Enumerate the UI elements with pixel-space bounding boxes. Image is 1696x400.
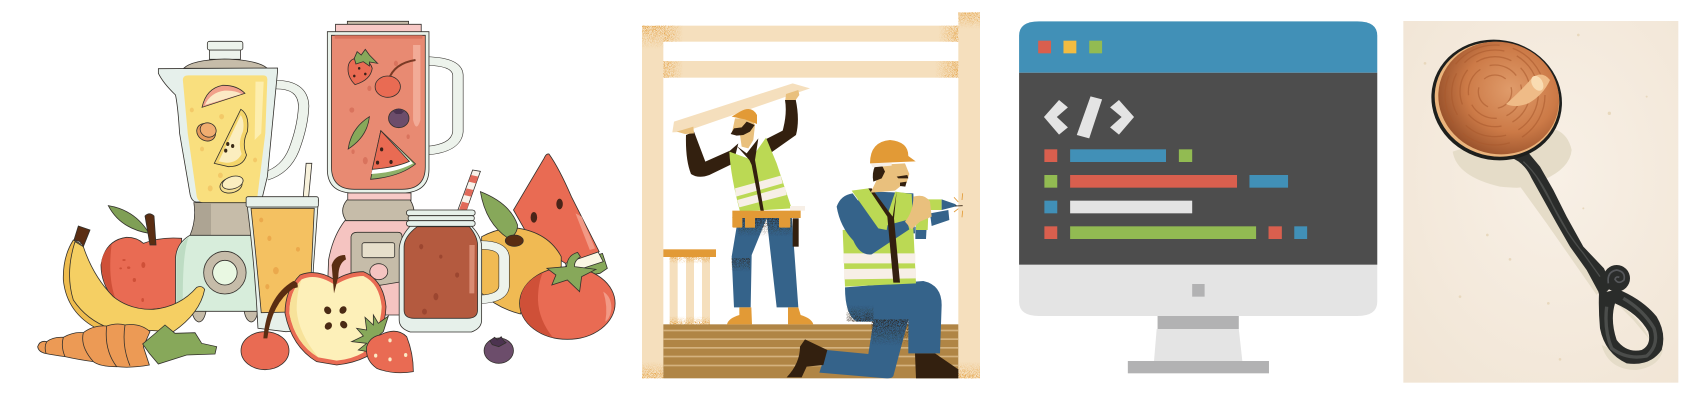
loop highlight bbox=[1606, 298, 1656, 357]
blender handle bbox=[266, 85, 304, 176]
bright glint bbox=[1529, 74, 1546, 93]
tool belt bbox=[732, 206, 805, 247]
strawberry bbox=[352, 315, 413, 373]
straw bbox=[303, 163, 312, 202]
blender collar bbox=[190, 203, 256, 236]
red apple bbox=[101, 206, 182, 309]
spoon handle bbox=[1510, 153, 1612, 298]
blueberry bbox=[484, 337, 513, 363]
blender handle bbox=[427, 61, 458, 151]
panel: smoothie blenders and fruit bbox=[38, 21, 615, 373]
juice specks bbox=[259, 218, 300, 289]
undershirt bbox=[857, 191, 915, 233]
dark sleeves bbox=[686, 99, 798, 177]
watermelon slice bbox=[513, 154, 607, 278]
hi-vis vest bbox=[843, 192, 916, 287]
panel: desktop computer with code bbox=[1019, 21, 1377, 373]
pink base bbox=[327, 221, 410, 315]
glass rim bbox=[246, 197, 318, 207]
smoothie top shade bbox=[335, 35, 422, 39]
blender lid bbox=[184, 41, 267, 68]
carrot bbox=[38, 324, 217, 367]
control panel bbox=[351, 232, 402, 290]
paper background bbox=[1403, 21, 1678, 383]
floating blueberry bbox=[389, 108, 409, 128]
carrot slice bbox=[193, 121, 219, 144]
blender lid bbox=[336, 21, 421, 32]
orange juice glass bbox=[246, 163, 318, 332]
green blender base bbox=[176, 235, 261, 311]
drill sparks bbox=[954, 193, 963, 217]
title bar bbox=[1019, 21, 1377, 73]
highlight on jar bbox=[413, 45, 420, 127]
code line 4 bbox=[1044, 226, 1307, 239]
handle spiral bbox=[1603, 265, 1630, 292]
cherry bbox=[241, 281, 298, 370]
blender jar bbox=[158, 68, 278, 202]
monitor chin bbox=[1019, 265, 1377, 316]
worker kneeling with drill bbox=[787, 140, 963, 378]
code line 3 bbox=[1044, 201, 1192, 213]
banana bbox=[63, 226, 205, 332]
code icon bbox=[1044, 96, 1134, 138]
dial bbox=[204, 251, 246, 294]
hard hat bbox=[870, 140, 916, 167]
blue sleeve arm bbox=[837, 193, 909, 254]
left blender bbox=[158, 41, 304, 322]
worker lifting board bbox=[672, 83, 813, 324]
striped straw bbox=[457, 170, 480, 213]
peach with leaf bbox=[480, 192, 561, 314]
jar highlight bbox=[469, 245, 475, 293]
head bbox=[871, 163, 909, 193]
right blender bbox=[327, 21, 458, 315]
spoon shadow bbox=[1453, 130, 1663, 370]
hands bbox=[677, 90, 799, 134]
juice bbox=[251, 208, 314, 313]
tomato bbox=[520, 252, 615, 339]
handle loop bbox=[1599, 289, 1663, 364]
apple half stem bbox=[332, 255, 346, 293]
head and beard bbox=[731, 109, 757, 148]
smoothie specks bbox=[349, 61, 410, 164]
jar body bbox=[399, 226, 482, 332]
floating strawberry bbox=[348, 49, 378, 85]
panel: wooden spoon illustration bbox=[1403, 21, 1678, 383]
beige band bbox=[343, 200, 414, 221]
jar lid bbox=[407, 210, 475, 226]
timber frame bbox=[642, 12, 980, 378]
bowl highlight bbox=[1506, 75, 1550, 106]
pear slice bbox=[214, 109, 248, 167]
apple seeds bbox=[323, 305, 349, 331]
deck floor bbox=[663, 324, 958, 378]
vest shoulder strap bbox=[852, 188, 889, 230]
kneeling trousers bbox=[819, 281, 942, 378]
base shading bbox=[176, 237, 189, 311]
highlight on jar bbox=[255, 82, 264, 140]
spoon bowl bbox=[1418, 25, 1576, 175]
jar juice bbox=[404, 227, 478, 318]
paper specks bbox=[1424, 34, 1648, 361]
smoothie specks bbox=[190, 108, 257, 191]
code line 2 bbox=[1044, 175, 1288, 188]
railing bbox=[663, 249, 716, 324]
jar specks bbox=[419, 244, 459, 315]
vest zip bbox=[868, 188, 900, 283]
monitor button bbox=[1192, 284, 1205, 297]
screen bbox=[1019, 73, 1377, 265]
mason jar of juice bbox=[399, 170, 504, 332]
wooden board bbox=[672, 83, 810, 132]
floating leaf bbox=[348, 117, 369, 149]
pink collar bbox=[348, 193, 411, 200]
code line 1 bbox=[1044, 149, 1192, 162]
monitor stand bbox=[1128, 316, 1269, 373]
banana slice bbox=[217, 173, 246, 196]
window buttons bbox=[1038, 41, 1102, 53]
floating cherry bbox=[375, 60, 416, 97]
panel: construction workers bbox=[642, 12, 980, 378]
wood grain bbox=[1445, 45, 1545, 145]
hi-vis vest bbox=[729, 138, 792, 212]
far boot bbox=[915, 353, 958, 378]
handle texture bbox=[1523, 162, 1600, 277]
boots bbox=[727, 307, 813, 324]
jar handle bbox=[481, 245, 504, 299]
red smoothie bbox=[331, 35, 425, 189]
glass body bbox=[247, 200, 318, 332]
drill bbox=[905, 196, 957, 239]
apple half bbox=[285, 255, 386, 365]
apple leaf bbox=[108, 206, 149, 233]
yellow smoothie bbox=[183, 75, 267, 203]
apple stem bbox=[145, 214, 156, 245]
floating watermelon bbox=[371, 131, 416, 179]
apple slice bbox=[202, 85, 245, 107]
blender feet bbox=[192, 311, 258, 322]
trousers bbox=[732, 215, 798, 307]
near boot bbox=[787, 339, 827, 377]
blender jar bbox=[327, 32, 429, 193]
